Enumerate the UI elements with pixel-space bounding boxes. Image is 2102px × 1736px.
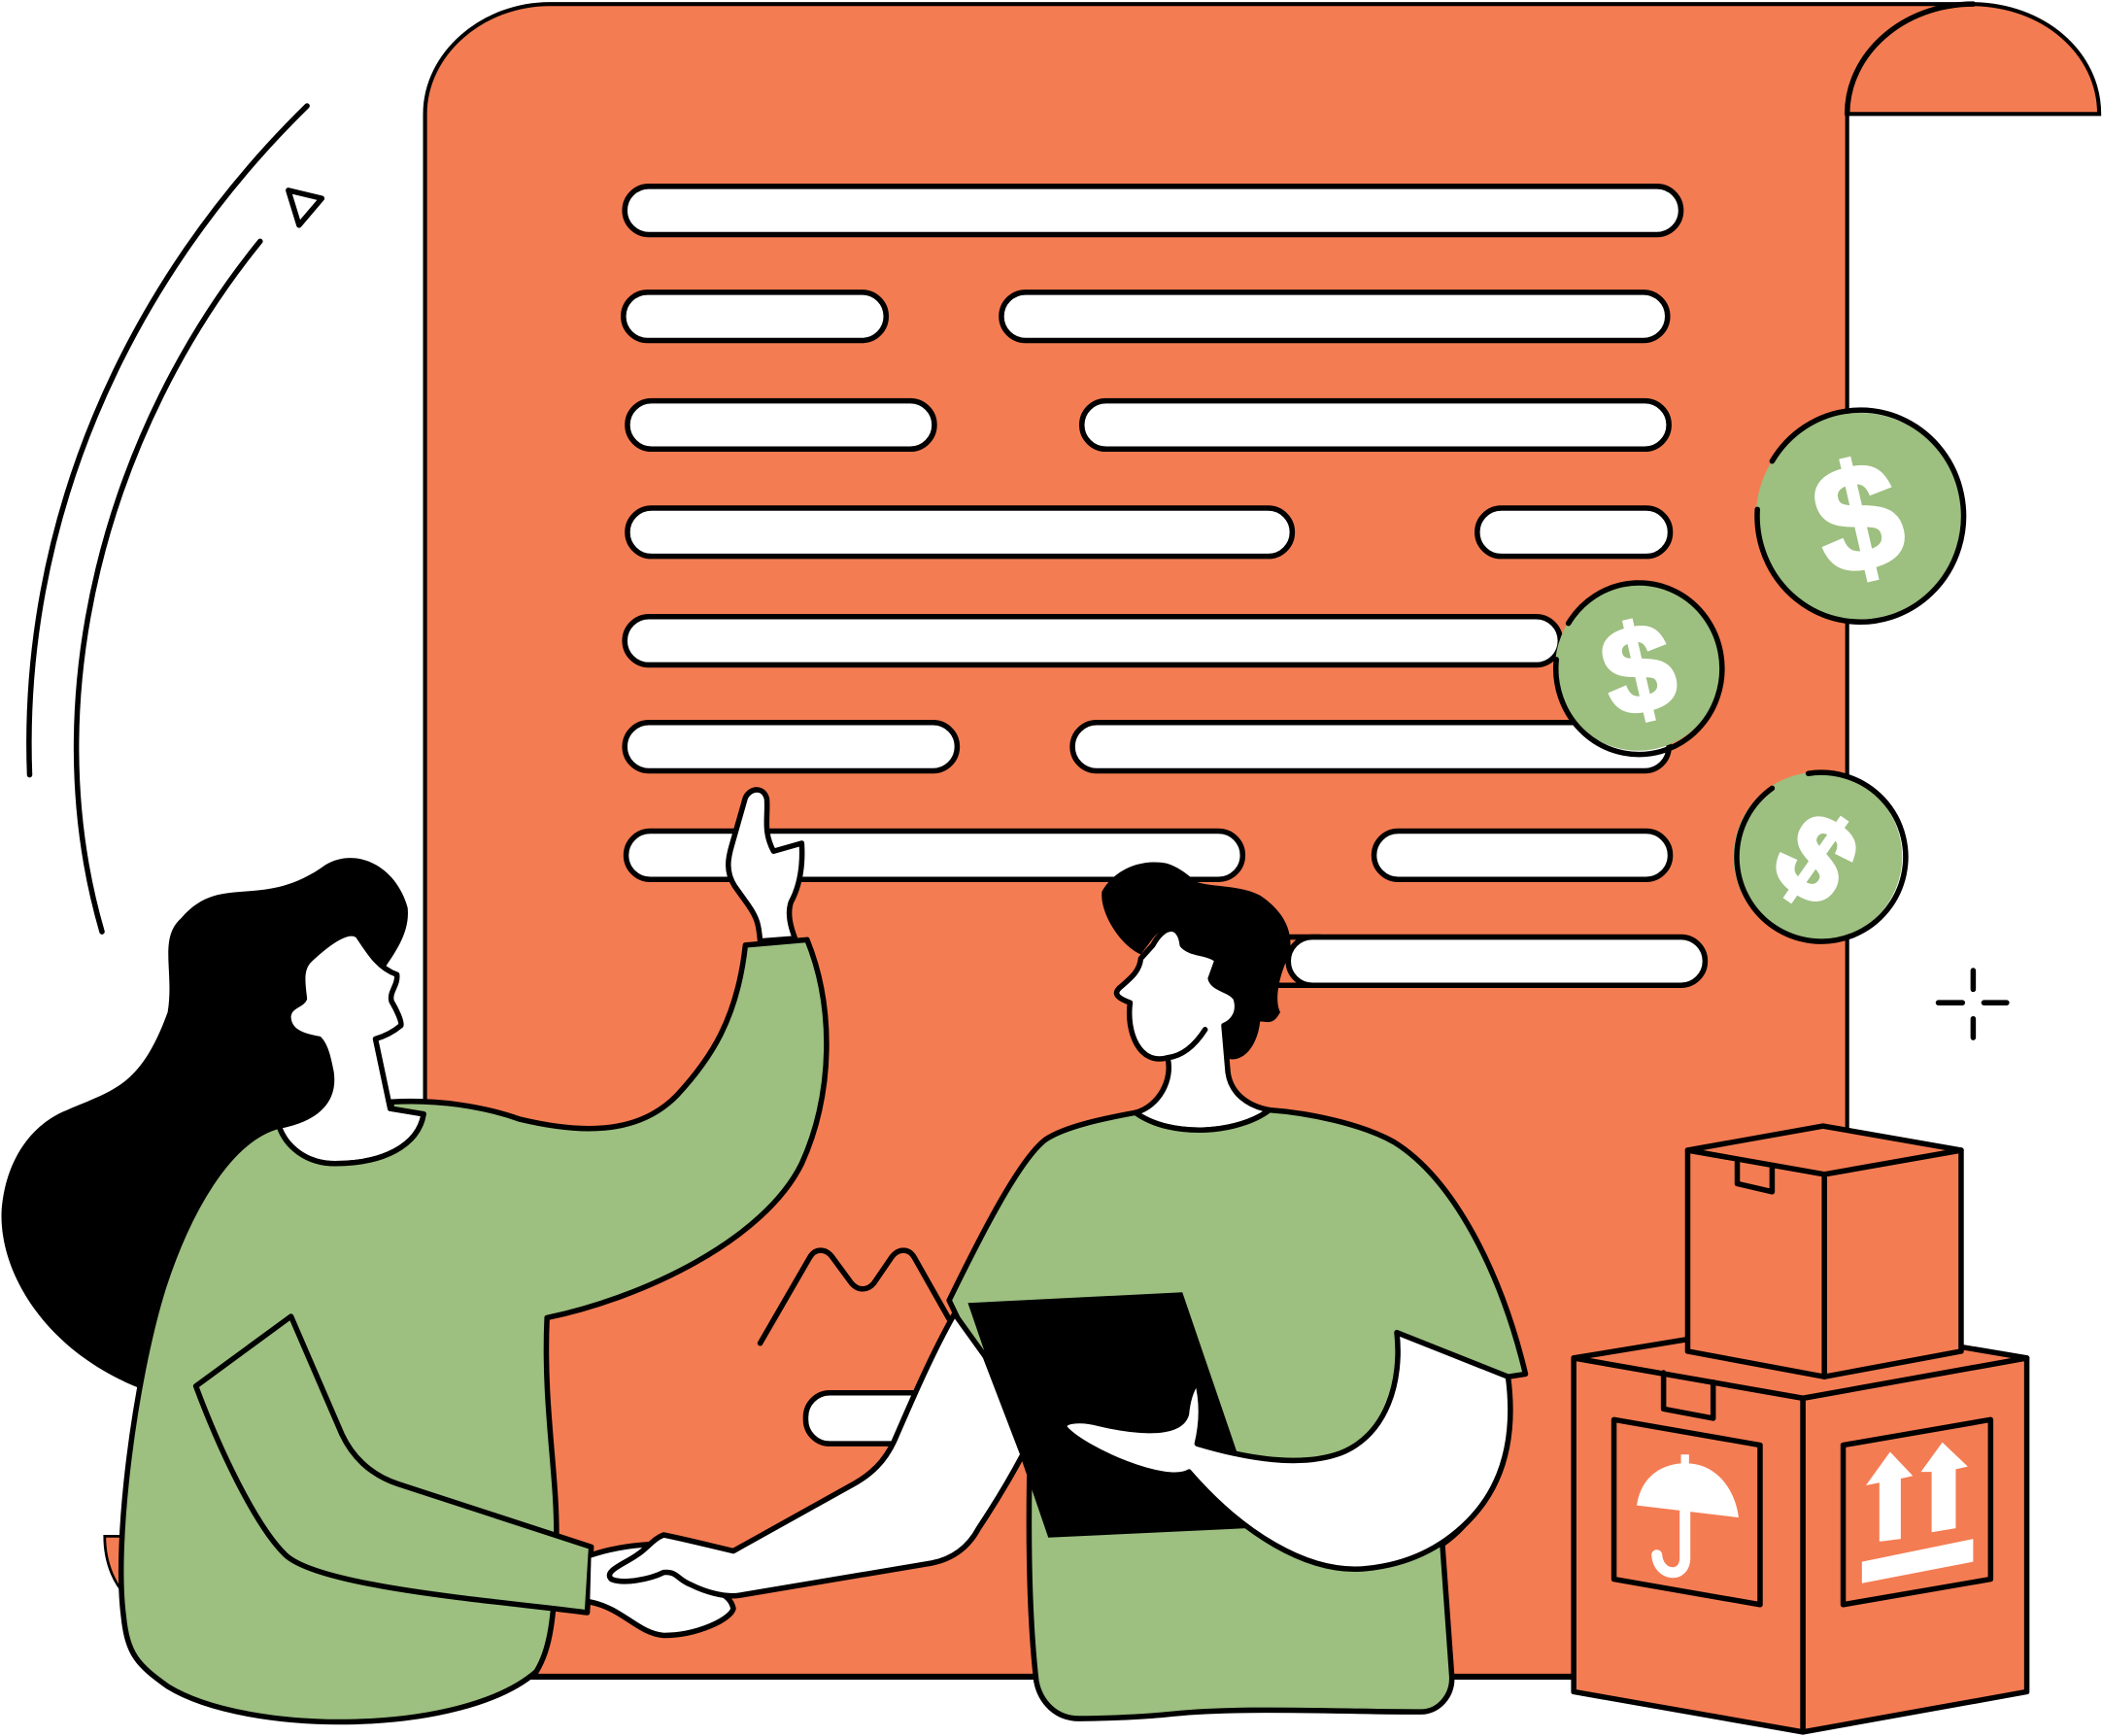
box: top <box>1687 1126 1961 1377</box>
icon: coin large: $ <box>1799 426 1917 609</box>
box: bottom <box>1574 1320 2027 1732</box>
hair <box>1102 862 1291 1059</box>
zigzag tick line <box>761 1250 949 1344</box>
man's right arm <box>609 1313 1023 1596</box>
raised hand <box>729 790 802 941</box>
icon: coin lower: $ <box>1751 785 1882 932</box>
illustration: man <box>609 862 1525 1719</box>
torso <box>949 1110 1525 1719</box>
icon: triangle <box>288 190 322 225</box>
icon: coin middle <box>1555 583 1722 755</box>
icon: coin middle: $ <box>1589 595 1687 744</box>
illustration: boxes <box>1574 1126 2027 1732</box>
face <box>279 934 424 1164</box>
icon: coin large <box>1756 410 1964 622</box>
icon: this way up arrows <box>1862 1443 1973 1583</box>
mouth <box>1168 1030 1205 1058</box>
sleeve forearm <box>196 1316 592 1613</box>
icon: coin lower <box>1733 772 1906 941</box>
woman's hand <box>590 1545 733 1636</box>
decorative arcs <box>29 106 307 932</box>
man's left arm <box>1065 1333 1510 1569</box>
clipboard <box>967 1292 1246 1538</box>
icon: sparkle <box>1939 970 2007 1038</box>
neck and face <box>1117 929 1270 1130</box>
illustration: woman <box>1 790 827 1722</box>
text lines on the paper <box>624 187 1705 1444</box>
body and raised arm <box>121 939 827 1722</box>
hair <box>1 858 408 1390</box>
icon: umbrella <box>1637 1454 1739 1573</box>
